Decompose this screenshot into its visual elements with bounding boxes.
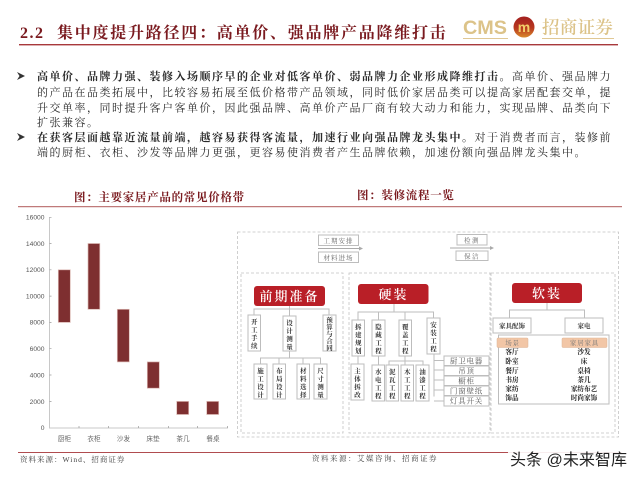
x axis labels: 衣柜	[87, 434, 101, 443]
panel: 硬装: 覆盖工程	[402, 322, 409, 355]
panel: 软装: 书房	[505, 375, 519, 384]
bullet 1	[17, 72, 25, 80]
panel: 软装: 家电	[578, 321, 591, 330]
panel: 前期准备: 开工手续	[251, 318, 258, 350]
text block: key points: 端的厨柜、衣柜、沙发等品牌力更强，更容易使消费者产生品牌依赖，加速份额向强品牌龙头集中。	[37, 145, 587, 159]
panel: 软装: 餐厅	[505, 366, 519, 375]
install list: 灯具开关	[450, 396, 483, 406]
text block: key points	[17, 69, 612, 159]
panel: 硬装: 水电工程	[375, 367, 382, 400]
y axis labels: 16000	[26, 214, 45, 222]
logo: CMS 招商证券: 招商证券	[542, 18, 613, 38]
panel: 软装: 家纺	[505, 384, 519, 393]
panel: 硬装: 主体拆改	[354, 366, 361, 399]
panel: 软装: 家居家具	[570, 338, 599, 347]
y axis labels: 8000	[30, 320, 45, 326]
panel: 软装: 家具配饰	[499, 321, 526, 330]
logo: CMS 招商证券	[463, 16, 614, 39]
x axis labels: 厨柜	[58, 434, 71, 443]
panel: 软装	[491, 273, 615, 433]
panel: 软装: 场景	[505, 338, 520, 347]
panel: 前期准备: 施工设计	[257, 366, 264, 399]
panel: 前期准备: 设计测量	[286, 318, 293, 351]
heading: diagram caption: 图：装修流程一览	[357, 188, 455, 202]
x axis labels: 床垫	[146, 434, 160, 443]
y axis labels: 0	[41, 425, 45, 432]
title: 2.2	[20, 25, 44, 42]
panel: 软装: 时尚家饰	[571, 393, 598, 402]
panel: 硬装	[349, 273, 490, 433]
panel: 前期准备: 预算与合同	[326, 315, 333, 352]
panel: 前期准备: 前期准备	[259, 289, 320, 304]
logo: CMS 招商证券: CMS	[463, 17, 507, 39]
x axis labels	[58, 434, 220, 443]
text block: key points: 的产品在品类拓展中，比较容易拓展至低价格带产品领域，同时低价家居品类可以提高家居配套交单，提	[37, 85, 612, 99]
panel: 软装: 茶几	[577, 375, 591, 384]
panel: 前期准备: 尺寸测量	[317, 367, 324, 399]
panel: 软装: 饰品	[505, 393, 519, 402]
y axis labels	[26, 214, 45, 432]
text block: key points: 扩张兼容。	[37, 115, 100, 129]
text block: key points: 升交单率，同时提升客户客单价，因此强品牌、高单价产品厂商有较大动力和能力，实现品牌、品类向下	[37, 100, 612, 114]
panel: 软装: 家纺布艺	[571, 384, 598, 393]
y axis labels: 6000	[30, 346, 45, 353]
source: chart: 资料来源：Wind、招商证券	[20, 454, 125, 464]
top steps: 工期安排	[324, 236, 354, 245]
source: diagram: 资料来源：艾媒咨询、招商证券	[312, 453, 438, 463]
process diagram	[238, 232, 618, 437]
panel: 前期准备: 材料选择	[300, 366, 307, 399]
panel: 软装: 桌椅	[577, 366, 591, 375]
y axis labels: 10000	[26, 294, 45, 300]
panel: 前期准备: 布局设计	[276, 366, 283, 399]
install list: 门窗壁纸	[450, 386, 483, 396]
y axis labels: 2000	[30, 399, 45, 406]
install list	[444, 356, 489, 406]
text block: key points: 在获客层面越靠近流量前端，越容易获得客流量，加速行业向强品牌龙头集中。对于消费者而言，装修前	[37, 130, 612, 144]
panel: 硬装: 木工工程	[404, 367, 411, 400]
panel: 前期准备	[241, 273, 343, 433]
panel: 硬装: 拆建规划	[355, 322, 362, 355]
text block: key points: 高单价、品牌力强、装修入场顺序早的企业对低客单价、弱品牌力企业形成降维打击。高单价、强品牌力	[37, 69, 612, 83]
panel: 硬装: 泥瓦工程	[389, 367, 396, 400]
y axis labels: 14000	[26, 241, 45, 248]
y axis labels: 4000	[30, 372, 45, 380]
heading: chart caption: 图：主要家居产品的常见价格带	[74, 190, 245, 204]
panel: 软装: 床	[581, 356, 588, 366]
title: 集中度提升路径四：高单价、强品牌产品降维打击	[57, 23, 448, 42]
install list: 橱柜	[458, 376, 475, 386]
watermark: 头条 @未来智库	[510, 451, 627, 469]
panel: 软装: 软装	[532, 286, 562, 301]
logo: CMS 招商证券: m	[518, 19, 530, 35]
panel: 硬装: 安装工程	[430, 321, 437, 353]
x axis labels: 沙发	[117, 434, 130, 443]
bar chart: price bands	[26, 214, 228, 443]
x axis labels: 茶几	[176, 434, 190, 443]
top steps: 保洁	[464, 252, 480, 260]
install list: 厨卫电器	[450, 356, 483, 366]
panel: 软装: 卧室	[505, 356, 519, 366]
panel: 软装: 沙发	[577, 347, 591, 356]
panel: 软装: 客厅	[505, 347, 519, 356]
top steps: 材料进场	[324, 253, 354, 262]
x axis labels: 餐桌	[206, 434, 220, 443]
panel: 硬装: 隐藏工程	[375, 322, 382, 355]
y axis labels: 12000	[26, 267, 45, 274]
panel: 硬装: 硬装	[378, 287, 409, 302]
top steps	[318, 234, 494, 262]
bars	[58, 244, 219, 414]
install list: 吊顶	[458, 366, 475, 376]
top steps: 检测	[464, 236, 480, 244]
panel: 硬装: 油漆工程	[419, 367, 426, 400]
